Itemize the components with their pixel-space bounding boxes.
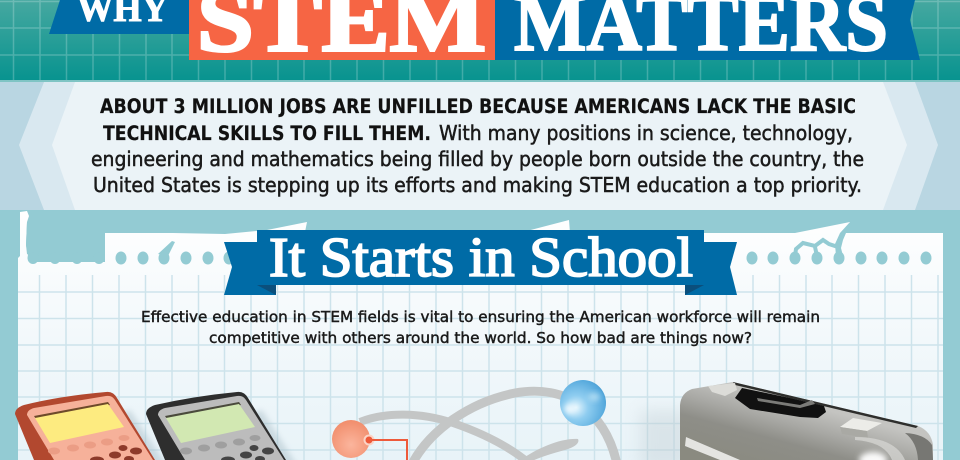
icon: atom	[332, 380, 617, 460]
intro text: TECHNICAL SKILLS TO FILL THEM.	[103, 122, 431, 145]
section heading ribbon	[224, 227, 737, 295]
subheading text: Effective education in STEM fields is vital to ensuring the American workforce will remain	[141, 308, 820, 326]
orange nucleus ball	[332, 420, 370, 458]
grid lines	[18, 275, 943, 460]
title banner: why	[49, 0, 190, 34]
connector line	[364, 434, 407, 460]
panel: header band	[0, 0, 960, 82]
panel: lower section background	[0, 210, 960, 460]
torn hole edges	[26, 222, 932, 264]
icon: gray calculator	[146, 392, 300, 460]
subheading text: competitive with others around the world. So how bad are things now?	[209, 329, 752, 347]
blue electron ball	[560, 380, 606, 426]
intro text: ABOUT 3 MILLION JOBS ARE UNFILLED BECAUSE AMERICANS LACK THE BASIC	[100, 95, 856, 118]
icon: orange calculator	[15, 392, 170, 460]
intro text	[91, 95, 864, 197]
heading text: It Starts in School	[269, 227, 693, 289]
intro text: With many positions in science, technology,	[439, 121, 853, 145]
intro text: engineering and mathematics being filled by people born outside the country, the	[91, 147, 864, 171]
panel: intro band	[0, 82, 960, 210]
panel: torn notebook paper	[18, 211, 943, 460]
icon: briefcase	[640, 382, 933, 460]
subheading text	[141, 308, 820, 347]
intro text: United States is stepping up its efforts and making STEM education a top priority.	[93, 173, 862, 197]
